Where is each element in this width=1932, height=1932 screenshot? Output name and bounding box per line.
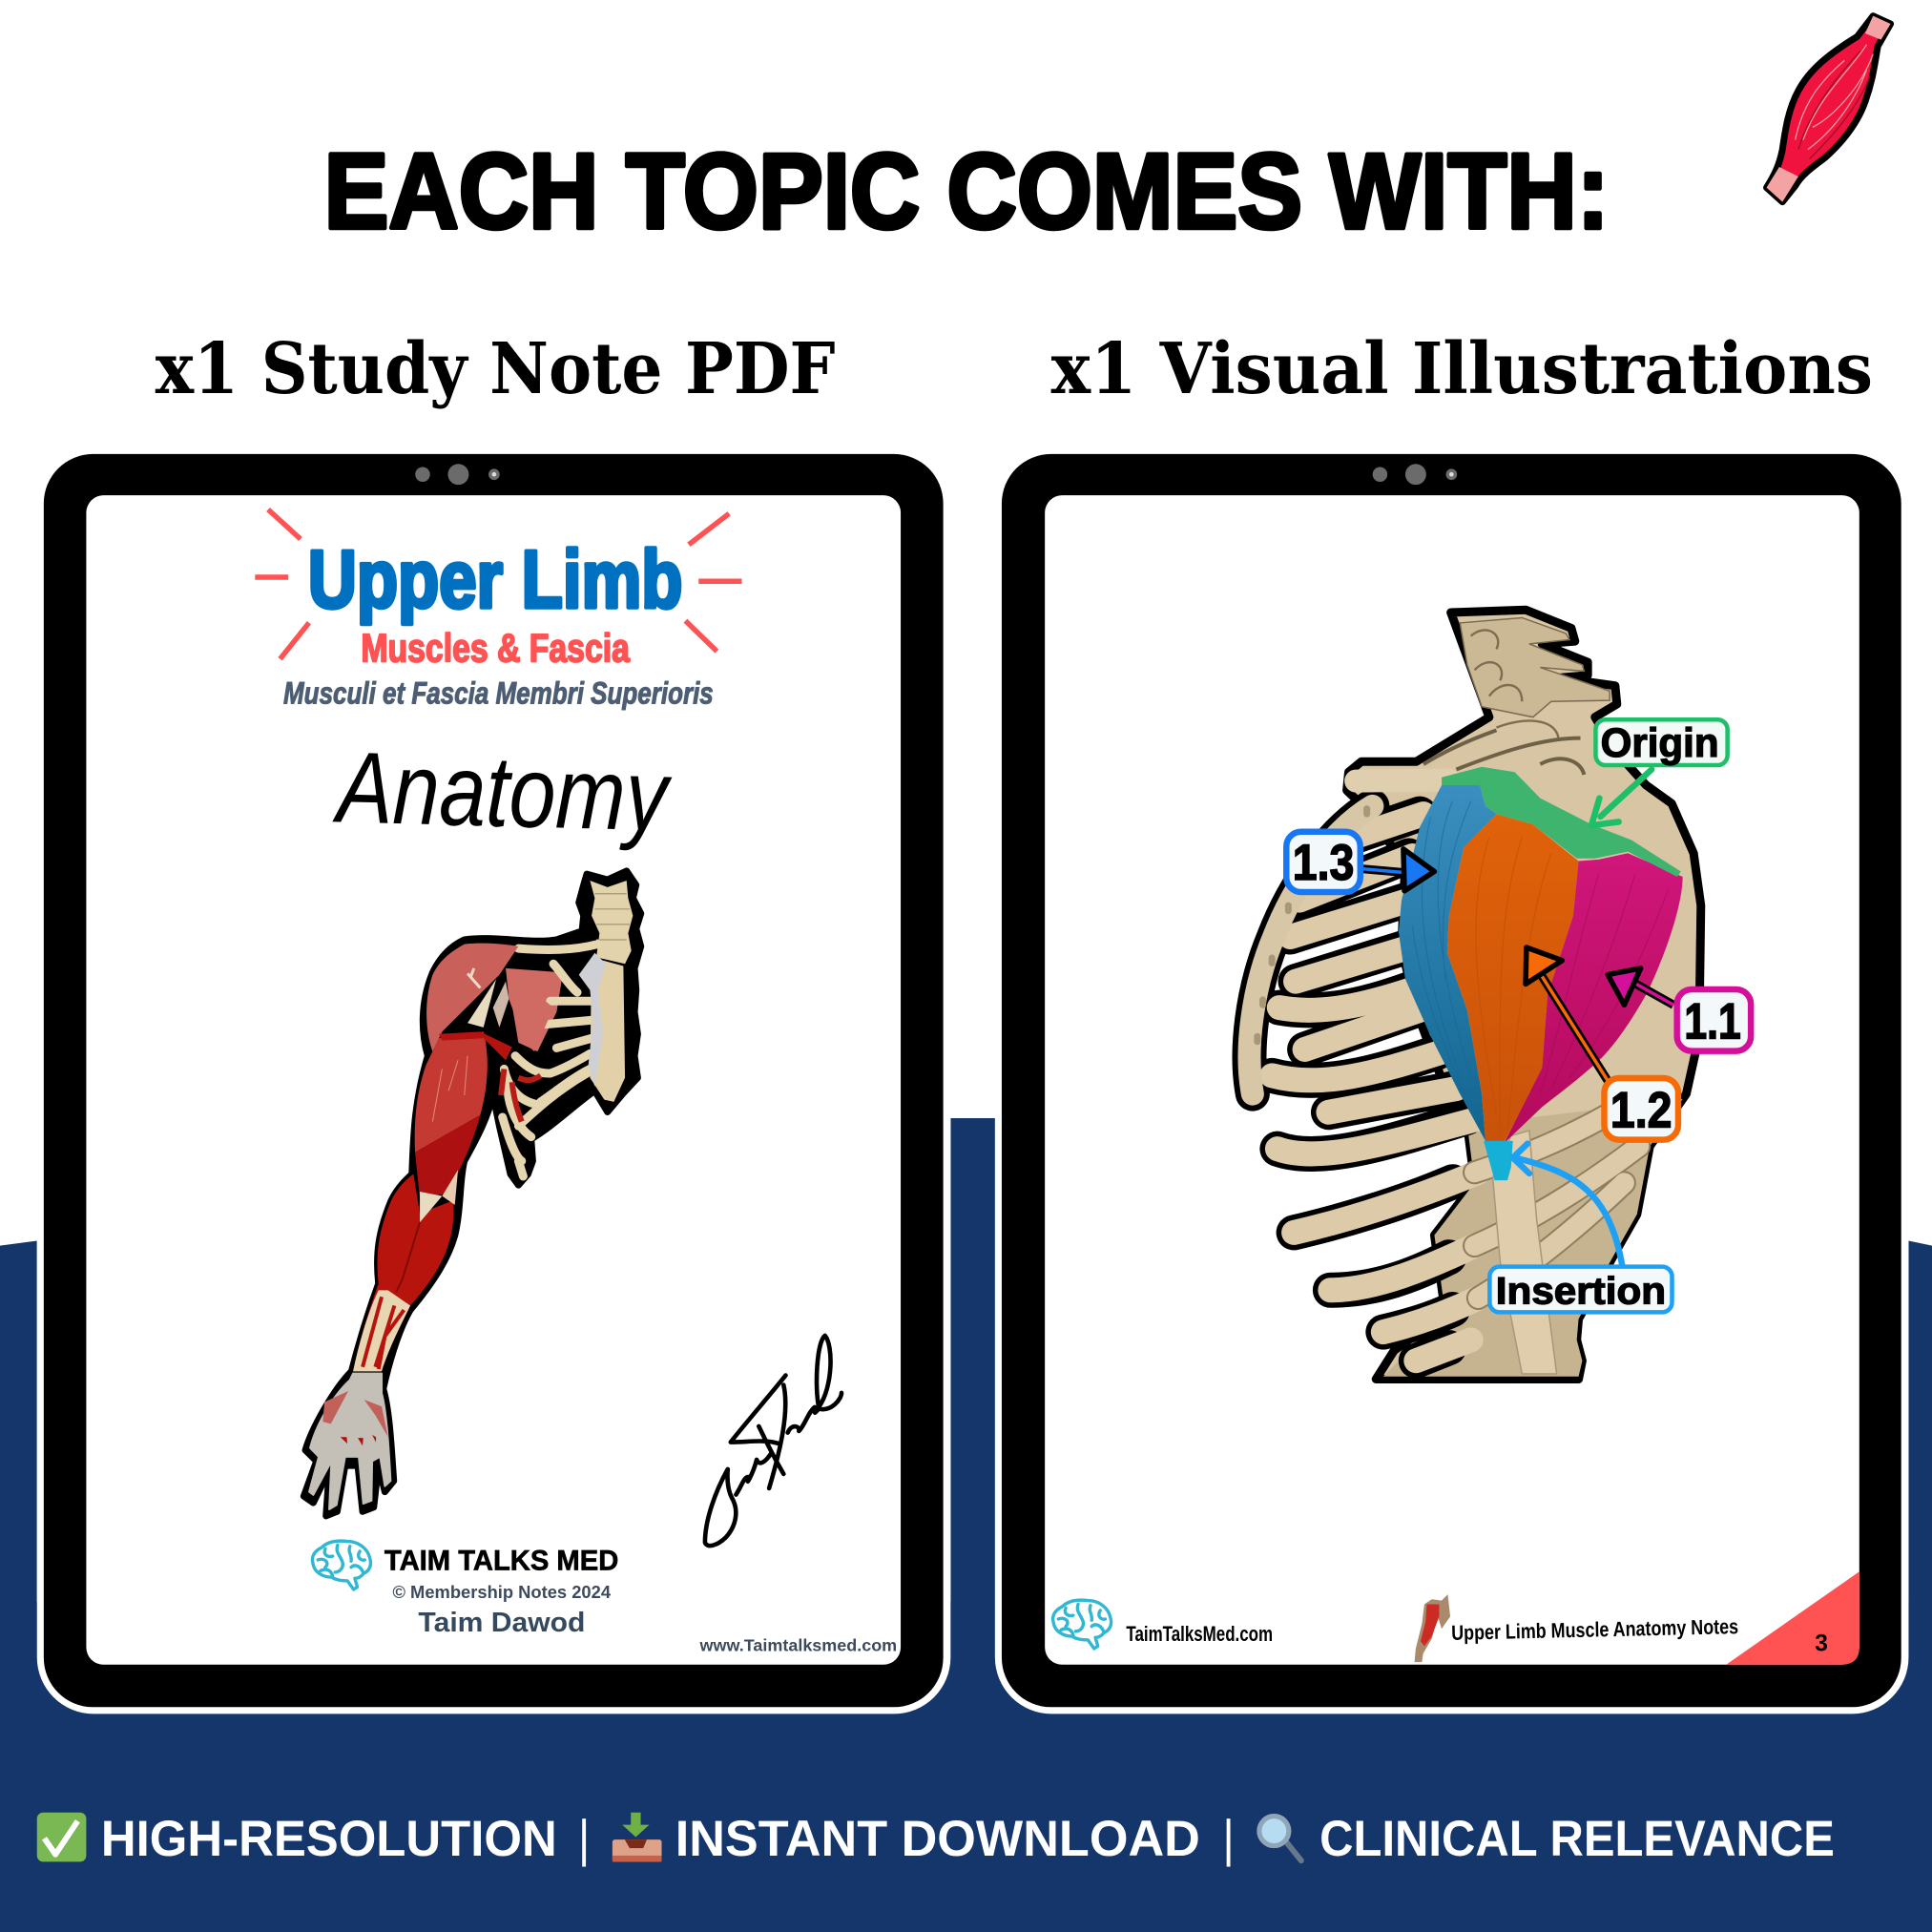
logo heading: upper limb: Upper Limb	[308, 535, 682, 626]
label: 1.3: 1.3	[1293, 835, 1354, 891]
navy background band	[0, 1118, 1932, 1932]
footer website: TaimTalksMed.com	[1126, 1622, 1273, 1646]
panel: right tablet	[995, 447, 1908, 1714]
illustration: shoulder muscle on skeleton	[1250, 610, 1701, 1379]
clavicle	[1356, 779, 1449, 781]
sternum	[590, 957, 625, 1102]
page number corner	[1726, 1571, 1859, 1665]
icon: download tray	[613, 1813, 662, 1861]
footer logo: brain	[1053, 1600, 1111, 1649]
divider one	[582, 1818, 586, 1867]
left ribs outline	[1272, 814, 1467, 1361]
signature	[705, 1336, 841, 1546]
footer banner	[37, 1811, 1835, 1867]
author: Taim Dawod	[418, 1608, 585, 1638]
label: origin: Origin	[1601, 720, 1719, 766]
panel: left tablet	[37, 447, 950, 1714]
title: EACH TOPIC COMES WITH:	[324, 131, 1610, 251]
thorax silhouette	[1347, 610, 1701, 1379]
pectoral backing	[506, 968, 563, 1051]
humerus	[1493, 1131, 1557, 1374]
divider two	[1227, 1818, 1231, 1867]
lower thorax shading	[1383, 1099, 1683, 1377]
arrow: 1.2	[1526, 947, 1608, 1081]
logo heading: upper limb: Muscles & Fascia	[361, 627, 631, 671]
heading: study note: x1 Study Note PDF	[156, 328, 836, 410]
muscle 1.3 blue	[1399, 785, 1496, 1141]
text: high resolution: HIGH-RESOLUTION	[101, 1811, 557, 1867]
arrow: origin	[1591, 770, 1652, 825]
logo: brain	[312, 1541, 370, 1589]
muscle 1.1 magenta	[1504, 853, 1683, 1144]
footer note title: Upper Limb Muscle Anatomy Notes	[1451, 1614, 1738, 1645]
label: 1.1: 1.1	[1684, 994, 1741, 1050]
text: instant download: INSTANT DOWNLOAD	[675, 1811, 1200, 1867]
wrist tendons	[353, 1290, 410, 1371]
sternum holes	[1257, 809, 1367, 1042]
left ribs	[1272, 814, 1493, 1361]
illustration: arm with muscles and thorax	[303, 871, 641, 1516]
pectoral deltoid	[426, 944, 518, 1051]
brand: taim talks med: TAIM TALKS MED	[384, 1545, 618, 1576]
spine	[590, 881, 633, 964]
biceps	[415, 1031, 488, 1153]
icon: check mark	[37, 1813, 86, 1861]
ribs	[503, 945, 598, 1176]
text: clinical relevance: CLINICAL RELEVANCE	[1319, 1811, 1835, 1867]
arrow: 1.3	[1363, 849, 1434, 891]
icon: muscle	[1767, 16, 1891, 202]
logo heading: upper limb	[255, 509, 741, 710]
origin green	[1442, 767, 1681, 877]
heading: visual illustrations: x1 Visual Illustrations	[1051, 328, 1873, 410]
label: 1.2: 1.2	[1610, 1083, 1672, 1139]
website: www.Taimtalksmed.com	[699, 1636, 897, 1655]
icon: magnifying glass	[1259, 1817, 1301, 1860]
cervical vertebrae	[1460, 617, 1610, 717]
footer icon: small arm	[1415, 1594, 1450, 1662]
insertion tendon	[1484, 1141, 1513, 1180]
arrow: 1.1	[1608, 968, 1673, 1005]
handwritten title: anatomy: Anatomy	[331, 731, 674, 853]
copyright: © Membership Notes 2024	[392, 1582, 612, 1602]
arrow: insertion	[1513, 1144, 1623, 1267]
label: insertion: Insertion	[1496, 1270, 1666, 1312]
page number corner: 3	[1815, 1631, 1828, 1657]
logo heading: upper limb: Musculi et Fascia Membri Superioris	[283, 675, 714, 710]
lower right ribs	[1475, 1094, 1643, 1298]
muscle 1.2 orange	[1447, 814, 1579, 1146]
forearm	[353, 1174, 453, 1371]
hand	[309, 1374, 390, 1509]
